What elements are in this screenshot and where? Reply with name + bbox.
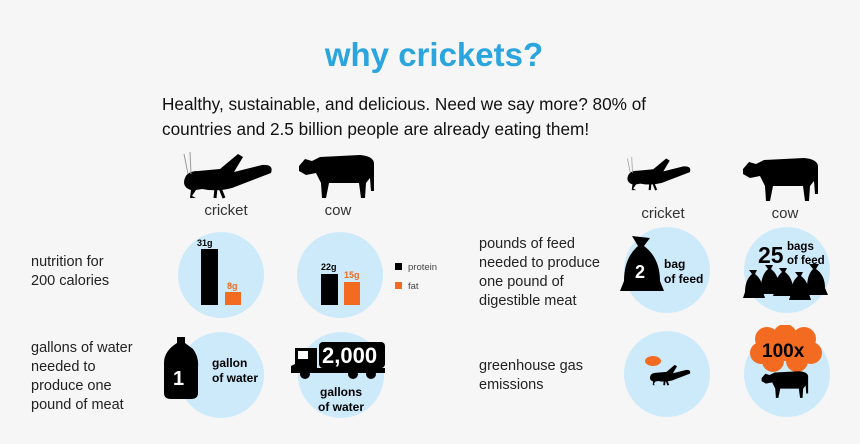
label: water: produce one <box>31 378 112 394</box>
label: nutrition: 200 calories <box>31 273 109 289</box>
circle: water cricket: of water <box>212 371 258 385</box>
label: greenhouse: emissions <box>479 377 543 393</box>
label: cricket right: cricket <box>641 205 685 222</box>
label: feed: digestible meat <box>479 293 577 309</box>
legend: protein <box>408 262 437 273</box>
label: feed: needed to produce <box>479 255 600 271</box>
icon: bag <box>620 236 664 291</box>
legend: fat <box>408 281 419 292</box>
circle: water cow: gallons <box>320 385 362 399</box>
circle: water cow <box>298 332 384 418</box>
circle: feed cricket: bag <box>664 257 685 271</box>
intro text <box>162 94 646 139</box>
text: of feed <box>787 255 825 267</box>
icon: cloud 100x with cow <box>750 325 822 398</box>
icon: truck <box>291 342 385 379</box>
text: bags <box>787 241 814 253</box>
circle: emissions cow <box>744 331 830 417</box>
label: water: gallons of water <box>31 340 133 356</box>
text: 25 <box>758 242 784 268</box>
label: cow left: cow <box>325 202 351 219</box>
chart: cricket nutrition <box>178 232 264 318</box>
chart: cricket nutrition: 8g <box>227 281 238 291</box>
icon: small cricket with cloud <box>645 356 690 386</box>
circle: water cricket: gallon <box>212 356 247 370</box>
legend <box>395 262 437 292</box>
icon: cricket right <box>627 157 690 190</box>
icon: bag: 2 <box>635 262 645 282</box>
label: water: pound of meat <box>31 397 124 413</box>
icon: bags cluster <box>743 264 828 300</box>
label: greenhouse <box>479 358 583 393</box>
chart: cow nutrition <box>297 232 383 318</box>
label: water <box>31 340 133 413</box>
circle: feed cricket <box>624 227 710 313</box>
circle: feed cricket: of feed <box>664 272 703 286</box>
title: why crickets? <box>325 36 543 73</box>
circle: feed cow <box>744 227 830 313</box>
icon: cloud 100x with cow: 100x <box>762 341 805 362</box>
chart: cow nutrition: 22g <box>321 262 337 272</box>
icon: cricket left <box>184 152 272 198</box>
label: feed <box>479 236 600 309</box>
label: nutrition <box>31 254 109 289</box>
label: greenhouse: greenhouse gas <box>479 358 583 374</box>
icon: jug <box>164 337 198 399</box>
label: water: needed to <box>31 359 96 375</box>
icon: truck: 2,000 <box>322 343 377 368</box>
circle: water cricket <box>178 332 264 418</box>
chart: cow nutrition: 15g <box>344 270 360 280</box>
label: feed: pounds of feed <box>479 236 575 252</box>
label: cricket left: cricket <box>204 202 248 219</box>
label: feed: one pound of <box>479 274 564 290</box>
icon: cow left <box>299 155 374 198</box>
chart: cricket nutrition: 31g <box>197 238 213 248</box>
circle: water cow: of water <box>318 400 364 414</box>
label: nutrition: nutrition for <box>31 254 104 270</box>
icon: cow right <box>743 158 818 201</box>
intro text: Healthy, sustainable, and delicious. Need we say more? 80% of <box>162 94 646 114</box>
label: cow right: cow <box>772 205 798 222</box>
intro text: countries and 2.5 billion people are already eating them! <box>162 119 589 139</box>
icon: jug: 1 <box>173 368 184 390</box>
text: 25 bags of feed <box>758 241 825 268</box>
circle: emissions cricket <box>624 331 710 417</box>
